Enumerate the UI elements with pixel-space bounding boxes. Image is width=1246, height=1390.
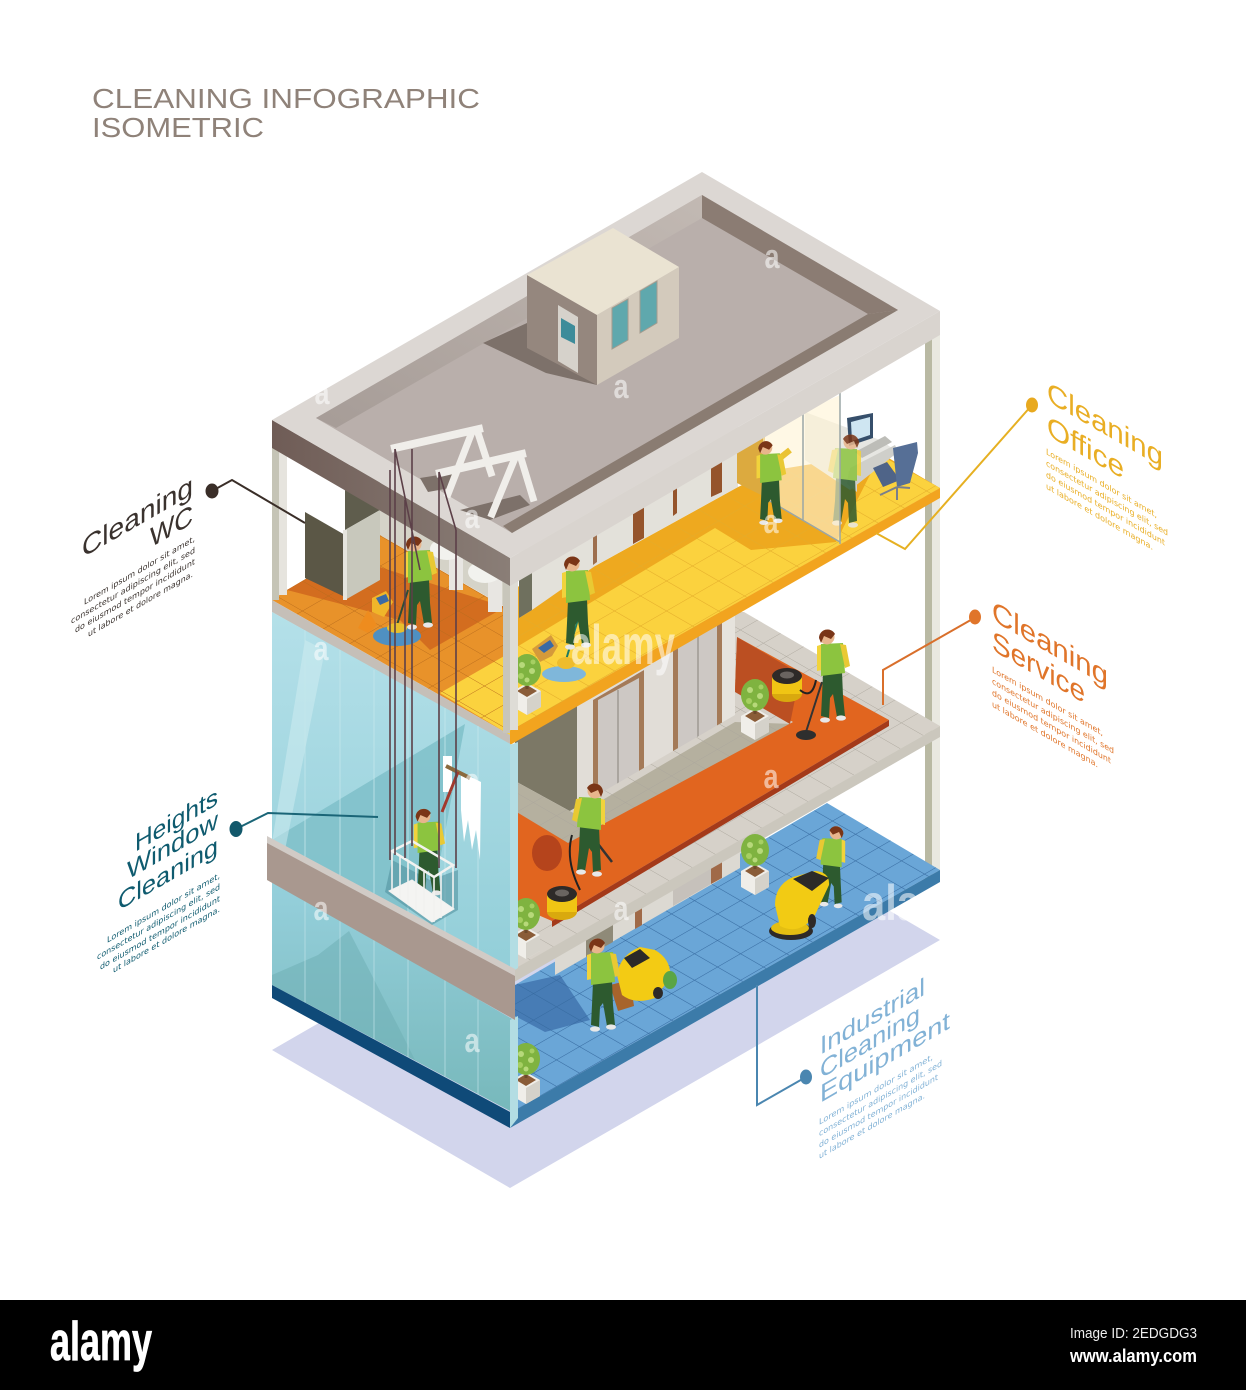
worker: scrubber (816, 826, 845, 908)
rim top (272, 172, 940, 558)
middle floor: cleaning service (509, 570, 940, 985)
watermarks: a (314, 630, 329, 668)
vacuum cleaner: lower (547, 886, 577, 920)
glass right edge strip (510, 742, 518, 1128)
cradle basket (389, 841, 454, 922)
ground back wall (555, 790, 740, 975)
label: cleaning service: ut labore et dolore magna. (992, 700, 1098, 770)
label: cleaning service (992, 594, 1114, 770)
plant (513, 654, 541, 715)
window cleaner cradle (385, 449, 481, 925)
puddle and mop corridor (542, 592, 586, 682)
windows (612, 281, 657, 349)
davit shadows (420, 472, 530, 520)
scrubber machine: back (769, 871, 829, 940)
title (92, 83, 480, 143)
website: www.alamy.com (1069, 1346, 1197, 1366)
penthouse (483, 228, 679, 385)
label: cleaning WC: consectetur adipiscing elit, sed (71, 546, 195, 627)
label: heights window cleaning: Window (127, 805, 218, 886)
label: cleaning office: ut labore et dolore magna. (1046, 482, 1153, 553)
label: heights window cleaning: ut labore et dolore magna. (113, 905, 220, 976)
roof inner well (316, 195, 898, 533)
label: industrial cleaning equipment: ut labore et dolore magna. (819, 1091, 925, 1162)
label: industrial cleaning equipment: Lorem ipsum dolor sit amet, (819, 1053, 933, 1128)
label: heights window cleaning: Cleaning (118, 831, 218, 917)
label: cleaning service: consectetur adipiscing elit, sed (992, 677, 1114, 757)
squeegee (442, 766, 470, 812)
office worker woman (828, 434, 861, 528)
label: heights window cleaning: do eiusmod tempor incididunt (100, 894, 220, 973)
watermarks: a (764, 238, 780, 276)
bottom black bar (0, 1300, 1246, 1390)
plant (512, 898, 540, 959)
sinks (430, 538, 502, 612)
label: cleaning WC: Cleaning (82, 470, 193, 564)
label: cleaning service: Lorem ipsum dolor sit amet, (992, 666, 1103, 739)
watermarks: a (314, 890, 329, 928)
blue tiled floor (510, 803, 940, 1128)
watermarks: a (764, 758, 779, 796)
davit arms (395, 429, 533, 520)
slab right face (510, 311, 940, 586)
glass facade (267, 612, 518, 1128)
yellow floor edge (510, 488, 940, 745)
right column (925, 330, 940, 882)
WC walls and stalls (305, 430, 505, 607)
label: cleaning office: Cleaning (1047, 375, 1163, 474)
label: cleaning WC: do eiusmod tempor incididunt (75, 557, 195, 636)
top floor: yellow corridor and WC (272, 393, 940, 746)
front and left columns (272, 445, 518, 733)
scrubber machine: front (610, 947, 677, 1011)
watermarks: a (614, 368, 629, 406)
upper glass (272, 612, 514, 978)
alamy logo: alamy (50, 1310, 152, 1372)
label: heights window cleaning: consectetur adipiscing elit, sed (97, 883, 220, 963)
worker: window cleaner (414, 809, 445, 897)
dark base (272, 985, 512, 1128)
label: heights window cleaning: Lorem ipsum dolor sit amet, (107, 871, 220, 946)
worker: vacuuming lower (570, 784, 612, 890)
glass partition (763, 393, 840, 544)
slab left face (272, 420, 510, 586)
label: cleaning service: Cleaning (992, 594, 1108, 693)
label: cleaning service: do eiusmod tempor incididunt (992, 689, 1111, 767)
ground shadow (272, 802, 940, 1188)
image id: Image ID: 2EDGDG3 (1070, 1325, 1197, 1342)
label: heights window cleaning: Heights (135, 782, 218, 858)
connector: industrial (757, 985, 812, 1105)
watermarks: alamy (571, 613, 675, 676)
label: industrial cleaning equipment (819, 972, 950, 1162)
ropes (390, 449, 456, 868)
label: cleaning office (1046, 375, 1168, 553)
worker: vacuuming upper (796, 630, 850, 740)
lower glass (272, 880, 514, 1113)
label: industrial cleaning equipment: Cleaning (820, 999, 920, 1085)
title: CLEANING INFOGRAPHIC (92, 83, 480, 114)
label: industrial cleaning equipment: do eiusmod tempor incididunt (819, 1073, 938, 1151)
gray spandrel band (267, 836, 515, 1020)
davit frames (395, 429, 533, 514)
office desk, monitor and chair (805, 412, 918, 500)
connector: WC (206, 480, 305, 523)
door (558, 305, 578, 373)
label: cleaning WC: Lorem ipsum dolor sit amet, (84, 534, 195, 608)
watermarks: a (764, 503, 779, 541)
worker: cleaning glass (756, 441, 790, 525)
label: cleaning office: Lorem ipsum dolor sit amet, (1046, 448, 1157, 521)
WC floor (272, 535, 518, 735)
worker: scrubber woman (587, 938, 620, 1032)
watermarks: a (614, 890, 629, 928)
label: cleaning WC: ut labore et dolore magna. (88, 570, 193, 640)
watermarks: a (464, 1022, 480, 1060)
roof slab (272, 172, 940, 586)
white soap patch (443, 756, 481, 860)
watermarks: a (464, 762, 480, 800)
label: industrial cleaning equipment: Industrial (820, 972, 925, 1061)
toolbox (532, 635, 558, 662)
title: ISOMETRIC (92, 112, 264, 143)
label: cleaning office: do eiusmod tempor incididunt (1046, 471, 1165, 549)
walls and elevators (515, 570, 735, 815)
label: industrial cleaning equipment: consectetur adipiscing elit, sed (819, 1059, 942, 1139)
label: cleaning WC: WC (150, 499, 193, 554)
watermarks: ala (862, 875, 921, 931)
WC floor edge (272, 600, 510, 746)
ground floor: industrial cleaning (510, 790, 940, 1128)
label: industrial cleaning equipment: Equipment (820, 1005, 950, 1109)
label: heights window cleaning (97, 782, 220, 976)
wet floor sign and bucket (358, 591, 393, 633)
watermarks: a (464, 498, 480, 536)
corridor back wall (519, 400, 765, 618)
label: cleaning service: Service (992, 624, 1085, 710)
plant (741, 834, 769, 895)
red carpet (515, 637, 889, 927)
connector: service (883, 610, 981, 705)
inner right wall (702, 195, 898, 314)
connector: office (876, 398, 1038, 549)
inner front wall (503, 310, 898, 533)
inner left wall (316, 195, 702, 428)
watermarks: a (314, 374, 330, 412)
worker: WC mopping (404, 536, 437, 630)
watermarks (314, 238, 921, 1060)
corridor floor (440, 453, 940, 731)
cradle shadow (385, 860, 458, 925)
puddle and mop (373, 590, 421, 646)
connector: heights (230, 813, 378, 837)
label: cleaning WC (71, 470, 195, 640)
label: cleaning office: Office (1047, 409, 1124, 486)
vacuum cleaner: upper (772, 668, 802, 702)
gray tile floor (509, 612, 940, 985)
plant (741, 679, 769, 740)
worker: corridor mopping (562, 556, 595, 650)
plant (512, 1043, 540, 1104)
label: cleaning office: consectetur adipiscing elit, sed (1046, 459, 1168, 539)
